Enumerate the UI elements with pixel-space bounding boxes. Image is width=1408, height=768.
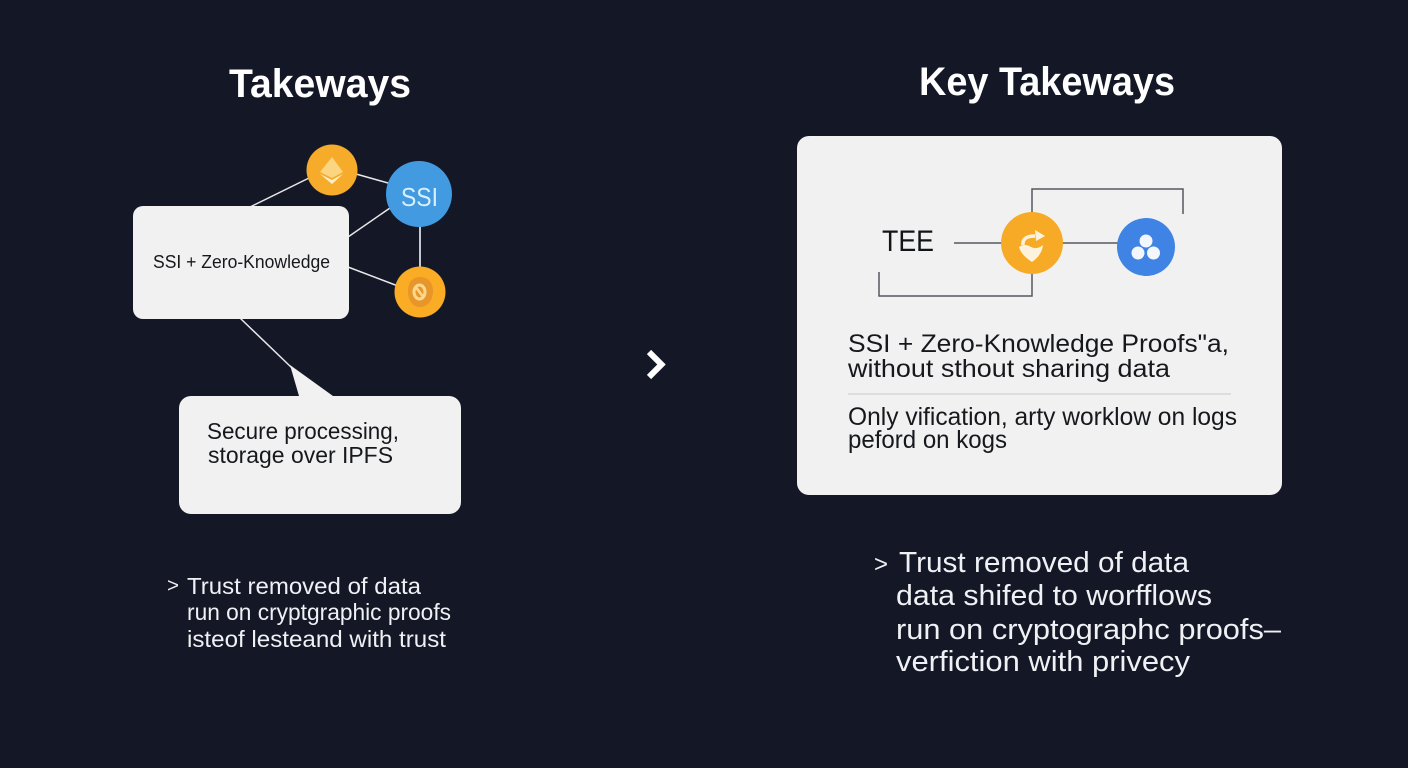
text block: right trust summary: verfiction with privecy — [896, 646, 1191, 678]
workflow connector lines — [879, 189, 1183, 296]
network connector lines — [240, 174, 420, 368]
text block: verification: Only vification, arty worklow on logs — [848, 403, 1237, 431]
icon: gold shield coin — [394, 266, 446, 318]
text block: right trust summary: data shifed to worfflows — [896, 580, 1212, 612]
arrow: chevron between panels — [649, 352, 662, 377]
icon: SSI badge — [386, 161, 452, 227]
text block: left trust summary: Trust removed of data — [187, 573, 421, 599]
callout: secure processing — [179, 365, 461, 514]
divider — [848, 393, 1231, 395]
card: TEE workflow — [797, 136, 1282, 495]
heading: Takeways: Takeways — [229, 62, 411, 106]
text block: right trust summary: > — [874, 551, 888, 578]
panel: left takeaways — [133, 62, 461, 652]
icon: blue three dots — [1117, 218, 1175, 276]
heading: Key Takeways: Key Takeways — [919, 60, 1175, 104]
text block: right trust summary — [874, 547, 1282, 678]
card: SSI + Zero-Knowledge: SSI + Zero-Knowledge — [153, 252, 330, 272]
text block: left trust summary: run on cryptgraphic proofs — [187, 599, 451, 625]
text block: SSI proofs: without sthout sharing data — [847, 355, 1170, 383]
icon: SSI badge: SSI — [401, 182, 438, 212]
text block: right trust summary: run on cryptographc proofs– — [896, 614, 1282, 646]
callout: secure processing: storage over IPFS — [208, 442, 393, 468]
panel: right key takeaways — [797, 60, 1282, 678]
text block: SSI proofs — [847, 330, 1229, 383]
icon: ethereum diamond — [306, 144, 358, 196]
text block: right trust summary: Trust removed of data — [899, 547, 1190, 579]
card: SSI + Zero-Knowledge — [133, 206, 349, 319]
text block: verification — [848, 403, 1237, 454]
label: TEE: TEE — [882, 225, 934, 258]
callout: secure processing: Secure processing, — [207, 418, 399, 444]
text block: left trust summary — [167, 573, 451, 652]
icon: orange shield with arrow — [1001, 212, 1063, 274]
text block: left trust summary: > — [167, 575, 179, 597]
text block: verification: peford on kogs — [848, 426, 1007, 454]
text block: left trust summary: isteof lesteand with trust — [187, 626, 447, 652]
text block: SSI proofs: SSI + Zero-Knowledge Proofs"a, — [848, 330, 1229, 358]
